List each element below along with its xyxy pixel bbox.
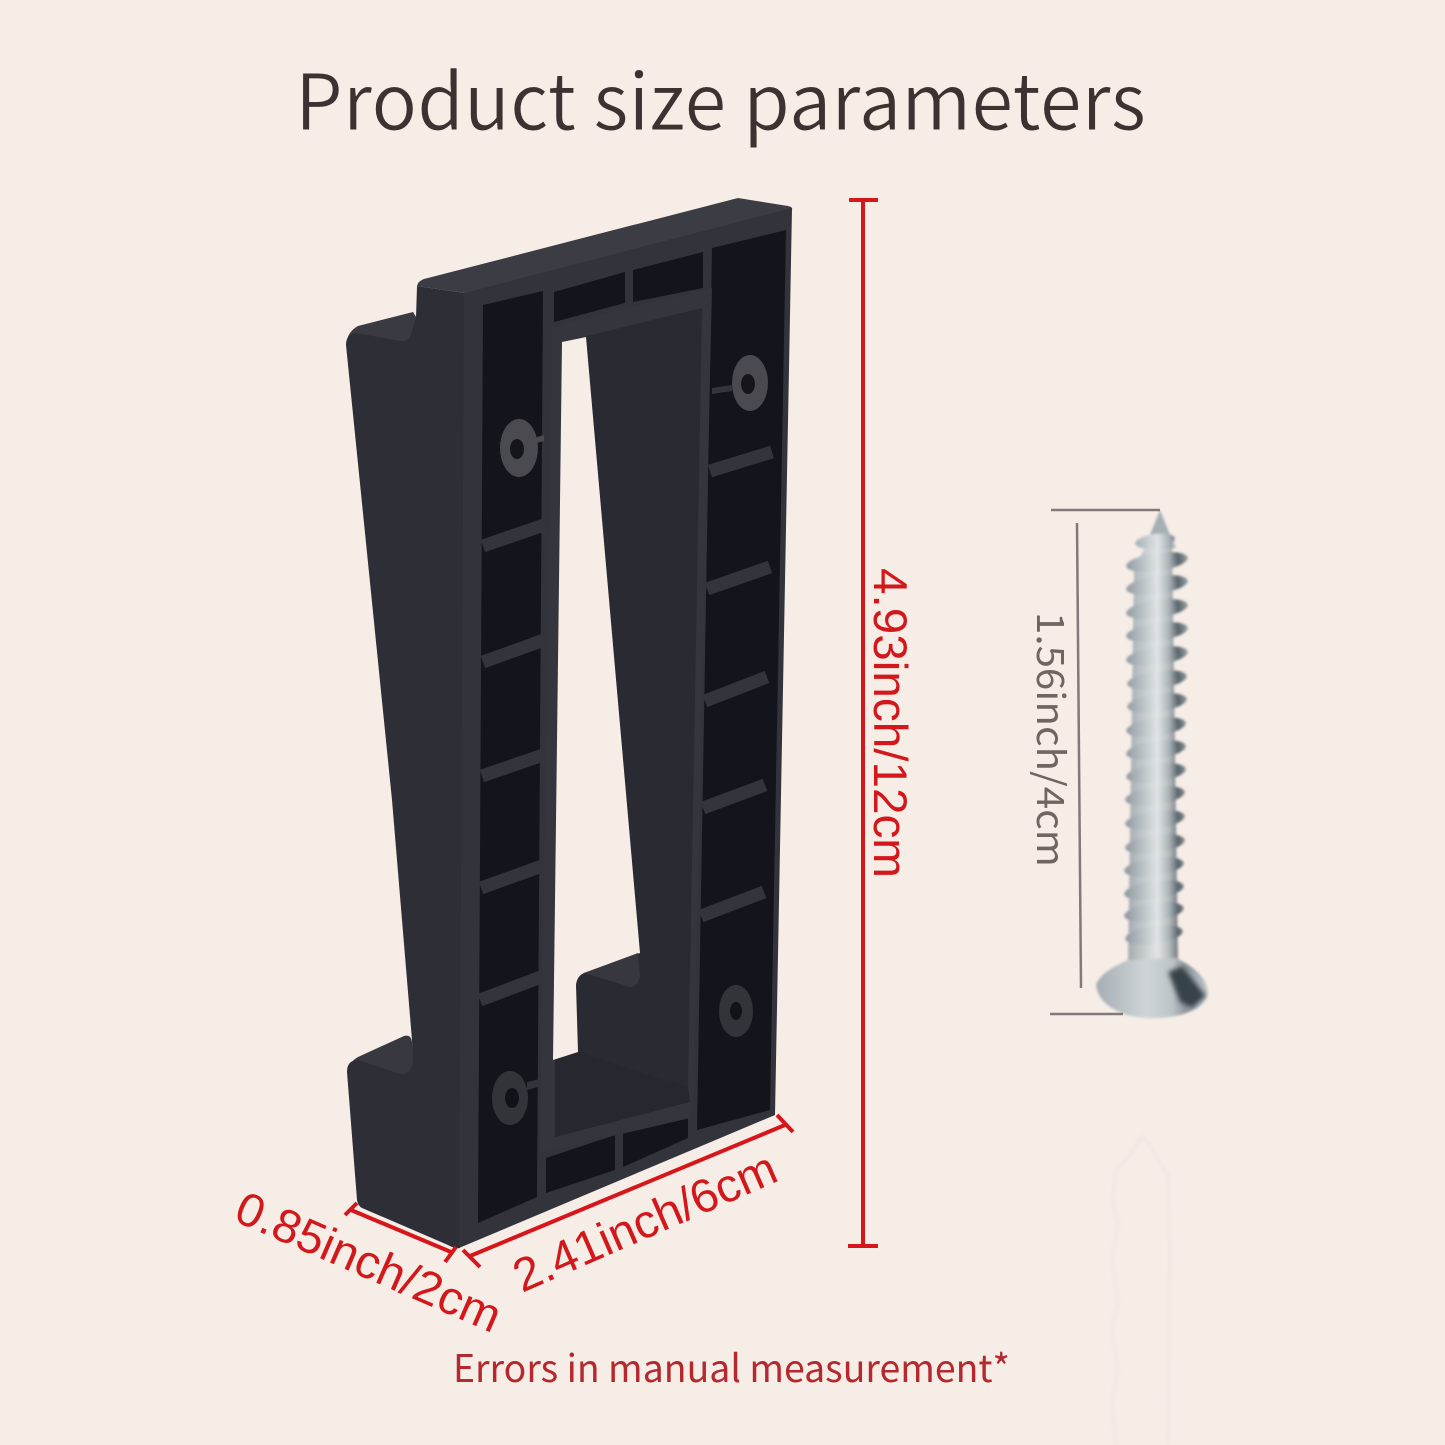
bracket product photo	[346, 198, 792, 1248]
screw tip	[1144, 510, 1176, 548]
upper pockets	[554, 252, 703, 322]
width dimension line	[463, 1115, 793, 1267]
mounting post: lower right	[719, 985, 753, 1037]
disclaimer note: Errors in manual measurement*	[453, 1338, 1010, 1393]
bracket top lip	[417, 198, 792, 293]
mounting post: upper right	[712, 355, 768, 411]
depth dimension line	[345, 1203, 456, 1262]
screw	[1096, 510, 1208, 1018]
faint screw reflection	[1112, 1136, 1170, 1445]
window floor	[555, 1052, 690, 1137]
left recess column	[478, 291, 543, 1223]
depth label: 0.85inch/2cm	[228, 1181, 510, 1342]
bracket left side wall	[346, 286, 465, 1248]
width label: 2.41inch/6cm	[505, 1141, 784, 1302]
screw head	[1096, 958, 1208, 1018]
screw length label: 1.56inch/4cm	[1026, 612, 1081, 867]
lower pockets	[546, 1105, 688, 1193]
screw head slot shadow	[1168, 966, 1206, 1008]
window frame	[540, 288, 712, 1153]
screw threads	[1123, 531, 1189, 948]
mounting post: upper left	[500, 419, 544, 477]
inner ledge	[584, 953, 640, 987]
height dimension line	[848, 199, 878, 1246]
lower notch surface	[348, 1036, 416, 1085]
inner far wall	[553, 308, 702, 1087]
upper notch surface	[347, 312, 418, 350]
ribs	[480, 452, 772, 1000]
height label: 4.93inch/12cm	[864, 568, 917, 878]
mounting post: lower left	[492, 1071, 540, 1125]
right recess column	[697, 230, 786, 1130]
screw shaft	[1128, 545, 1178, 962]
screw dimension lines	[1050, 510, 1160, 1014]
title: Product size parameters	[295, 41, 1146, 153]
bracket front face	[459, 208, 792, 1248]
see-through opening	[553, 337, 640, 1060]
